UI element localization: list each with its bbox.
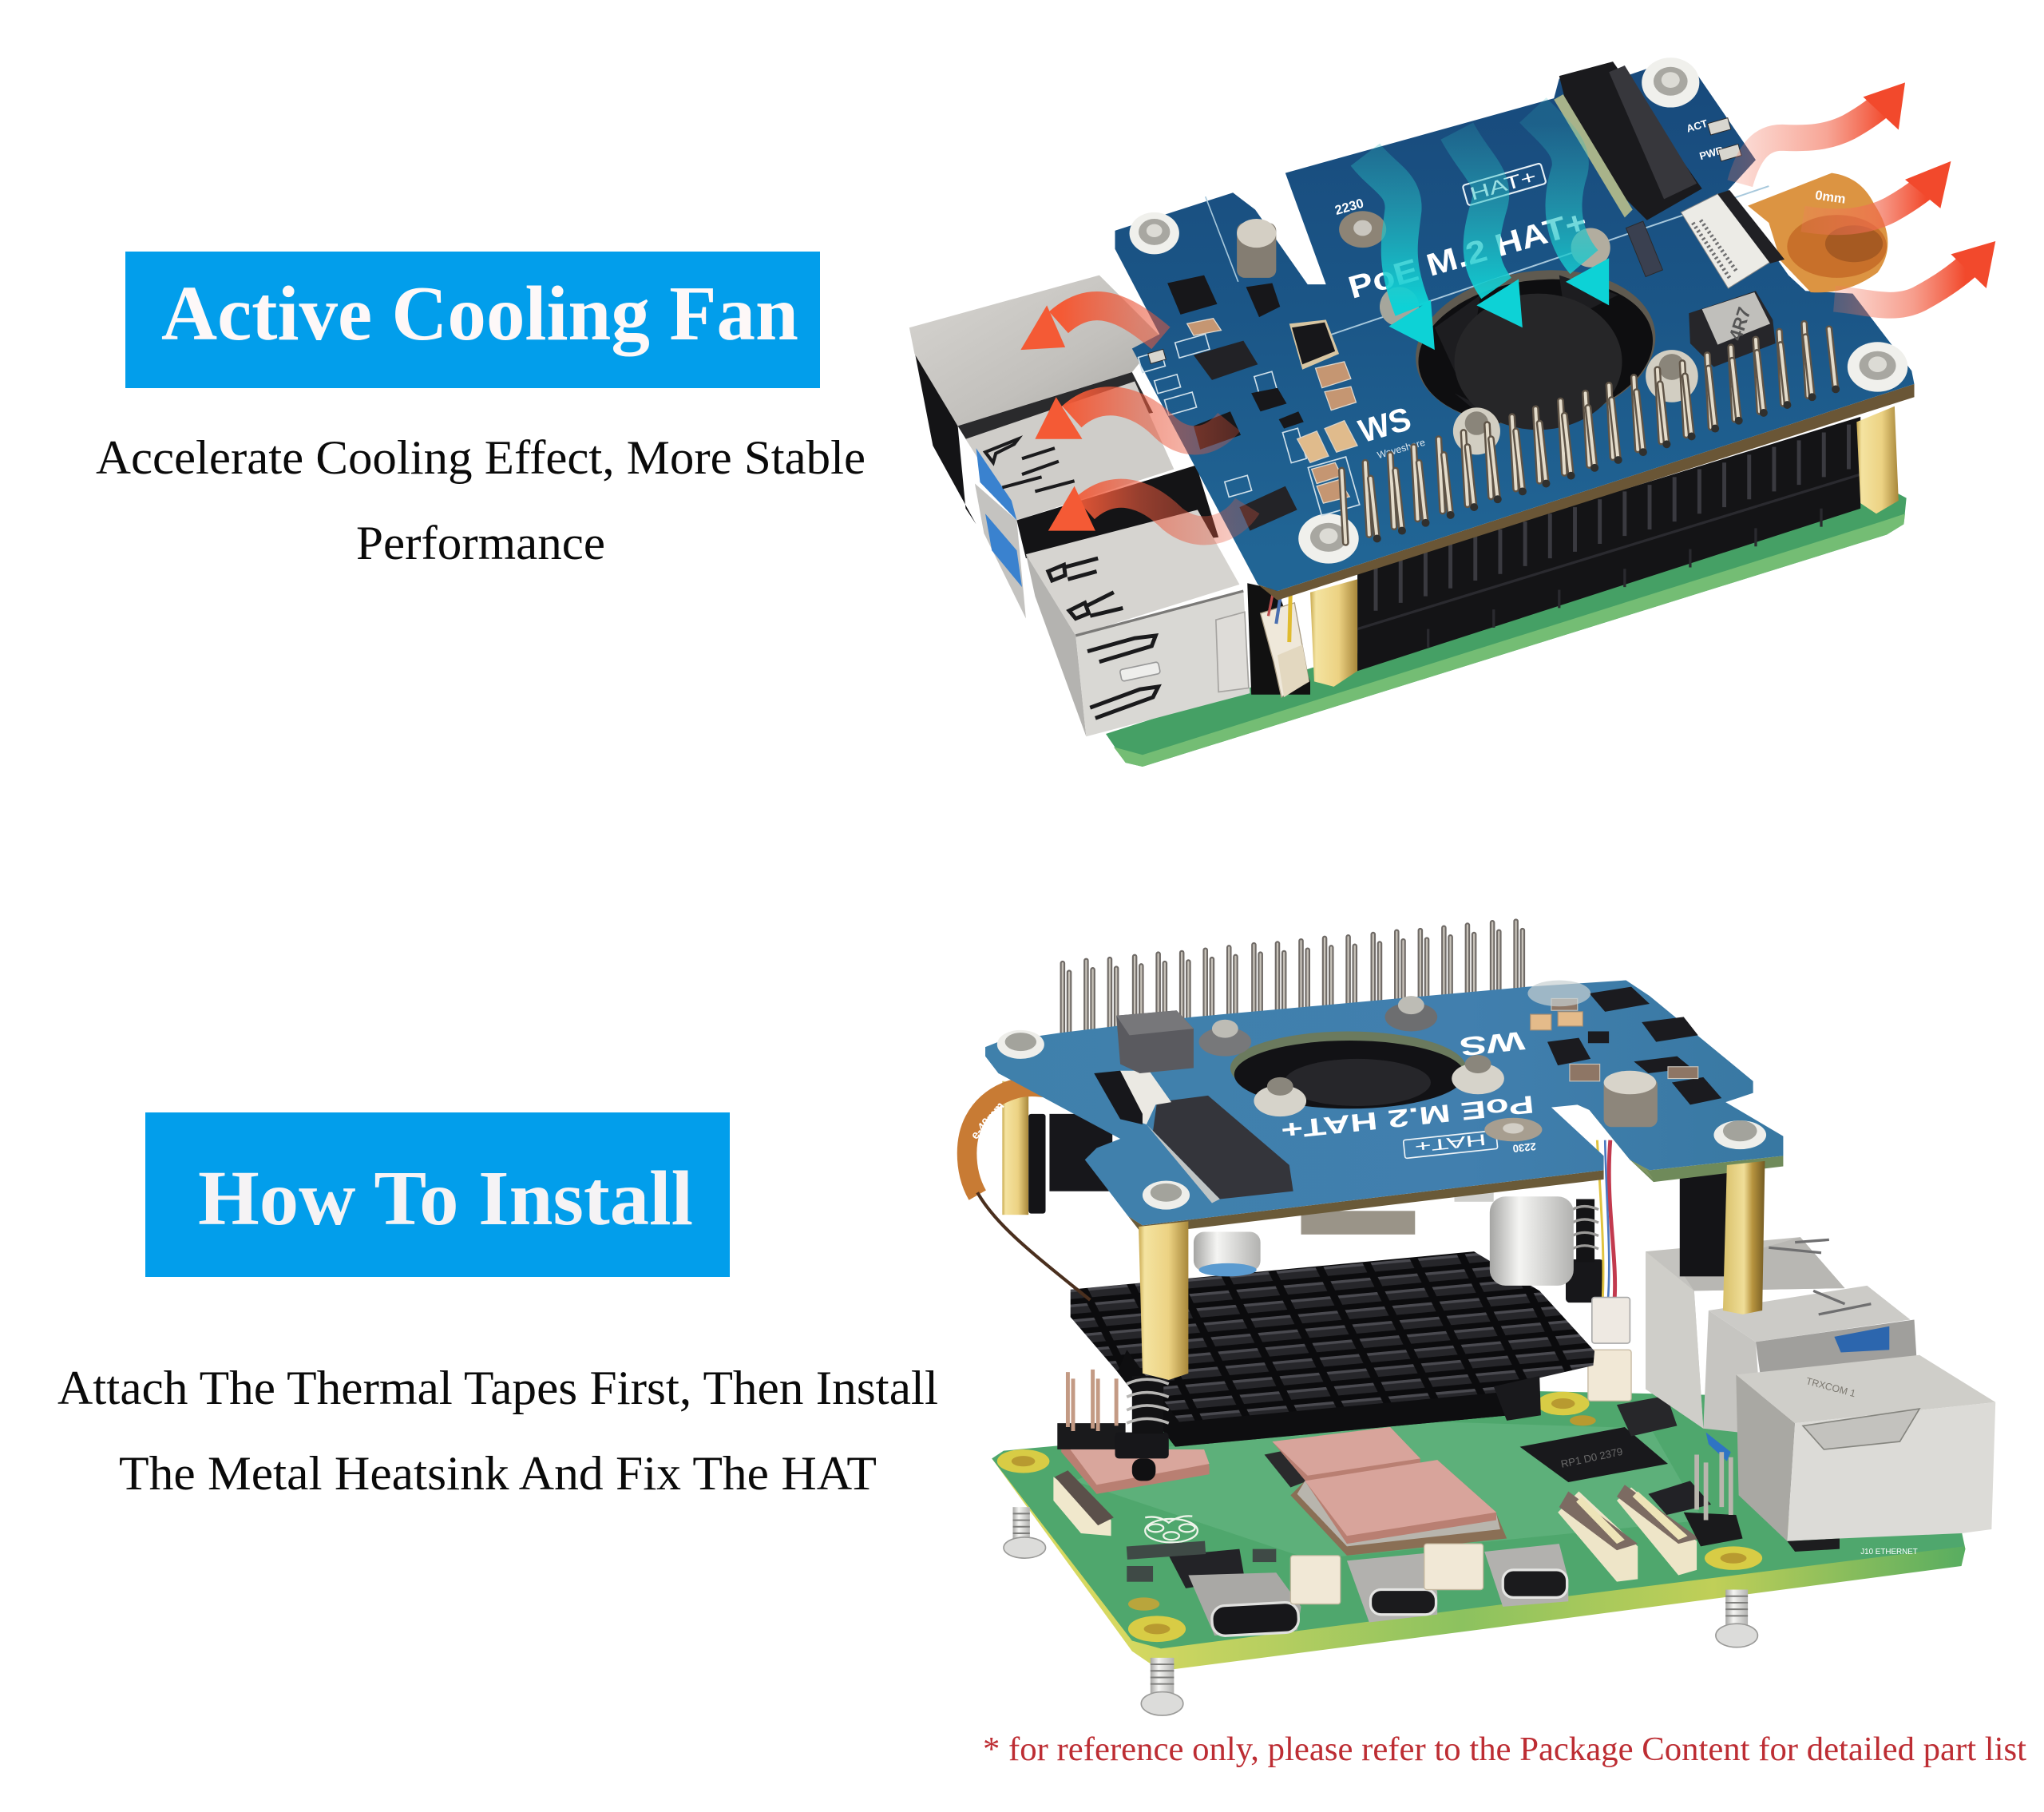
header pins [1063,922,1523,1053]
text block: cooling description: Performance [356,517,605,569]
HAT silkscreen: Waveshare [1376,437,1427,461]
HAT silkscreen text upside down: HAT+ [1413,1130,1487,1155]
screws and hex nuts [997,996,1766,1210]
HAT silkscreen: ACT [1685,117,1709,135]
text block: cooling description: Accelerate Cooling Effect, More Stable [96,431,866,484]
mounting screws [1004,1507,1757,1715]
HAT silkscreen: WS [1354,400,1415,450]
wires and white connector [1247,583,1310,697]
ribbon connectors [1053,1470,1699,1582]
fan from above [1230,1031,1466,1108]
arrow: cool air in, left [1365,155,1435,350]
HAT silkscreen: PoE M.2 HAT+ [1345,204,1591,306]
text block: install description: The Metal Heatsink And Fix The HAT [119,1447,877,1500]
Raspberry Pi green board [1106,487,1907,767]
FPC connector and ribbon [1681,173,1888,292]
panel: how to install heading: How To Install [198,1156,693,1241]
cooling fan [1406,256,1666,439]
panel: how to install heading [145,1112,730,1277]
stacking header [1357,417,1860,671]
heatsink [1071,1251,1594,1447]
HAT silkscreen: PWR [1698,144,1725,162]
RP1 chip [1520,1396,1711,1515]
ethernet jack [1736,1355,1995,1556]
white JST connectors [1290,1350,1631,1604]
HAT board [1115,64,1915,601]
inductor [1689,291,1776,367]
orange ribbon cable: e-40mm [969,1100,1007,1142]
GPIO small header [1684,1433,1743,1546]
HAT silkscreen [1333,117,1725,461]
HAT silkscreen text upside down [1280,1026,1537,1159]
arrow: cool air in, middle [1457,131,1523,327]
orange ribbon cable [967,1087,1108,1300]
product photo: bottom, exploded install view [967,922,1995,1715]
panel: active cooling fan heading [125,252,820,388]
HAT silkscreen: HAT+ [1468,165,1539,204]
arrow: cool air in, right [1533,110,1609,305]
HAT silkscreen text upside down: 2230 [1512,1140,1537,1155]
GPIO left pins [1057,1370,1126,1449]
SoC under large pad [1290,1460,1507,1556]
ethernet jack: TRXCOM 1 [1805,1375,1857,1399]
text block: cooling description [96,431,866,569]
footnote: * for reference only, please refer to the Package Content for detailed part list [983,1731,2026,1768]
text block: install description: Attach The Thermal Tapes First, Then Install [57,1362,938,1414]
back standoff and black blocks [1002,1081,1727,1276]
arrow: hot air out, middle left [1035,397,1229,440]
RP1 chip: RP1 D0 2379 [1560,1445,1624,1470]
USB ports [1646,1237,1917,1435]
panel: active cooling fan heading: Active Cooling Fan [161,271,798,356]
Raspberry Pi board [992,1389,1966,1671]
HAT silkscreen: 2230 [1333,196,1365,218]
text block: install description [57,1362,938,1500]
raspberry logo [1145,1516,1198,1542]
HAT silkscreen text upside down: WS [1458,1026,1527,1062]
M.2 connector [1554,61,1702,220]
ethernet and USB ports [909,276,1250,736]
inductor: 4R7 [1725,304,1755,343]
left spring post [1115,1376,1169,1481]
HAT board [985,980,1783,1235]
small chips [1127,1541,1276,1582]
HAT components [1527,980,1721,1104]
arrow: hot air out, upper left [1020,305,1161,350]
fan cable [1592,1140,1630,1343]
arrow: hot air out, top right [1740,82,1905,184]
M.2 connector, FPC and inductor [1094,1010,1293,1203]
electronic components [1139,118,1754,531]
arrow: hot air out, lower right [1834,241,1995,305]
front brass standoffs [1139,1161,1765,1380]
brass standoffs [1310,406,1899,687]
USB-C and micro HDMI ports [1169,1544,1568,1636]
arrow: hot air out, middle right [1803,161,1951,222]
FPC connector and ribbon: 0mm [1814,188,1847,207]
capacitors and right spring post [1194,1186,1604,1302]
thermal pads [1061,1427,1420,1494]
arrow: hot air out, lower left [1048,486,1247,531]
HAT silkscreen text upside down: PoE M.2 HAT+ [1280,1090,1535,1144]
ethernet jack: J10 ETHERNET [1860,1548,1918,1556]
product photo: top, fan airflow [909,57,1995,767]
screws and hex posts [1130,57,1907,564]
header pins [1341,323,1836,542]
